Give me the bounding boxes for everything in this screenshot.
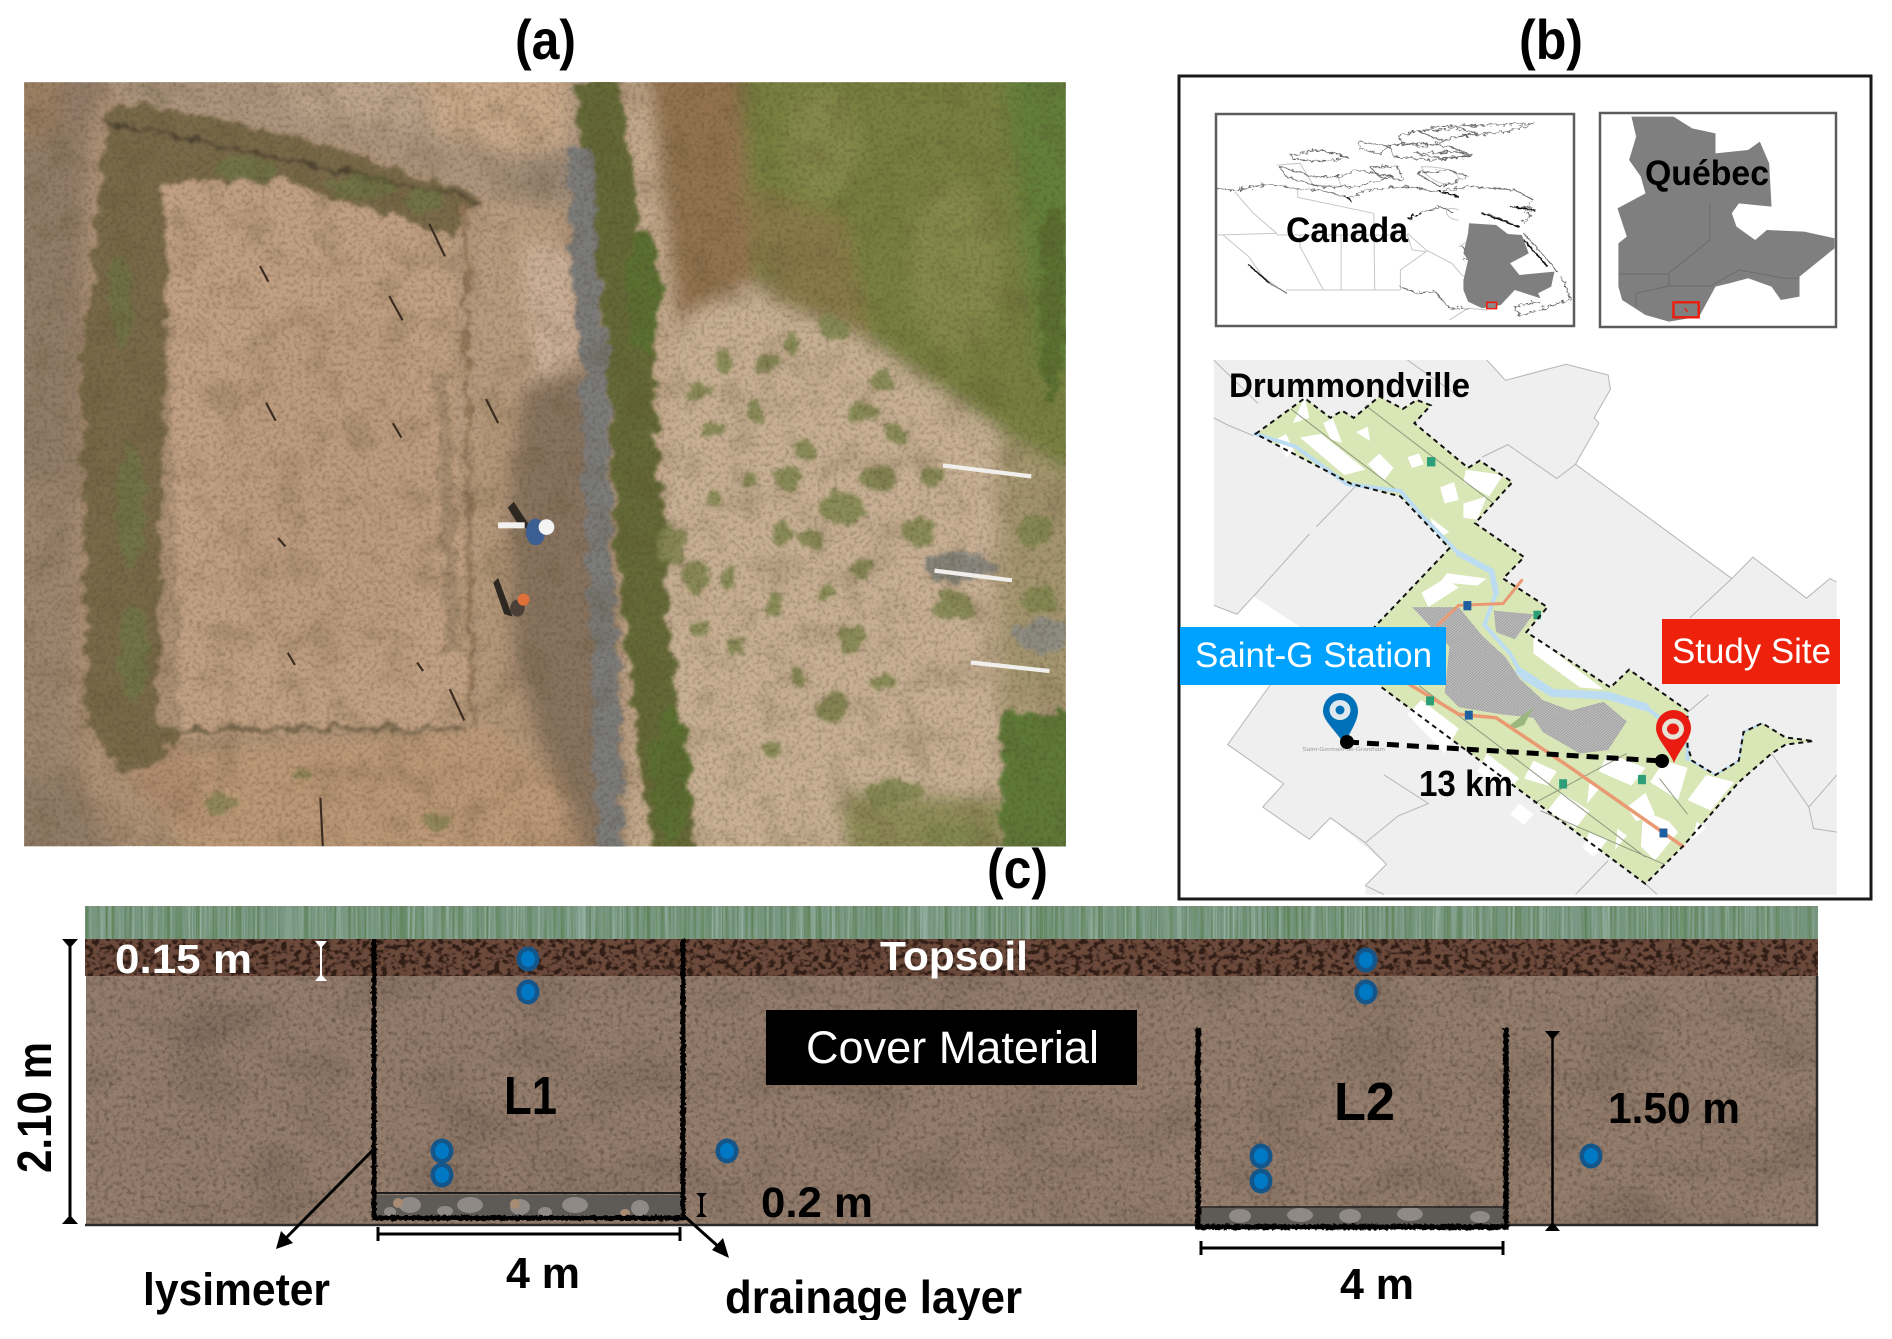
lysimeter walls L2 — [1198, 1028, 1506, 1227]
dimension: 2.10 m — [9, 939, 78, 1224]
inset map: Québec — [1600, 113, 1836, 327]
sensor outside L1 — [716, 1138, 738, 1164]
drainage layer L1 — [376, 1193, 681, 1218]
dimension: 0.2 m — [696, 1179, 873, 1227]
sensors L1 — [430, 946, 540, 1188]
label: Québec: Québec — [1645, 154, 1769, 193]
dimension: 0.2 m: 0.2 m — [761, 1179, 873, 1227]
dimension: 4 m under L1: 4 m — [506, 1249, 580, 1298]
callout: Saint-G Station — [1180, 627, 1446, 685]
map: Drummondville municipality: Saint-Germain-de-Grantham — [1302, 748, 1385, 753]
panel label (c): (c) — [987, 837, 1048, 900]
label: Topsoil: Topsoil — [880, 933, 1028, 979]
lysimeter L2 — [1198, 948, 1506, 1227]
panel a: aerial photo of the test field — [0, 60, 1088, 870]
dimension: 4 m under L2: 4 m — [1340, 1260, 1414, 1309]
dimension: 4 m under L1 — [378, 1227, 680, 1298]
callout: Saint-G Station: Saint-G Station — [1195, 636, 1432, 675]
panel label (b): (b) — [1519, 8, 1583, 71]
dimension: 1.50 m: 1.50 m — [1608, 1084, 1740, 1133]
cover material layer — [85, 976, 1817, 1225]
label: lysimeter: lysimeter — [143, 1264, 330, 1315]
panel b: location maps frame — [1179, 76, 1871, 899]
icon: person in orange hat — [493, 578, 530, 617]
map: Drummondville municipality — [1214, 360, 1837, 895]
lysimeter walls L1 — [374, 939, 683, 1218]
dimension: topsoil thickness — [315, 941, 327, 981]
label: Drummondville: Drummondville — [1229, 367, 1470, 405]
white pipes — [935, 465, 1049, 671]
panel label (a): (a) — [515, 8, 576, 71]
label box: Cover Material — [766, 1010, 1137, 1085]
grass layer — [85, 906, 1818, 939]
icon: red study site pin — [1656, 710, 1691, 763]
distance line between station and study site — [1340, 735, 1669, 768]
label: L2: L2 — [1334, 1072, 1395, 1132]
dimension: 1.50 m — [1545, 1031, 1740, 1231]
inset map: Canada — [1216, 114, 1574, 326]
label: 0.15 m: 0.15 m — [115, 936, 252, 982]
icon: person in white hat — [498, 502, 554, 545]
callout: Study Site — [1662, 619, 1840, 684]
callout: Study Site: Study Site — [1672, 632, 1831, 671]
label: L1: L1 — [504, 1066, 557, 1126]
label: Canada: Canada — [1286, 211, 1409, 250]
label: drainage layer: drainage layer — [725, 1271, 1022, 1323]
sensors L2 — [1250, 948, 1378, 1194]
dimension: 4 m under L2 — [1201, 1241, 1503, 1309]
label: 13 km: 13 km — [1419, 763, 1513, 804]
topsoil layer — [85, 939, 1818, 976]
icon: blue station pin — [1323, 693, 1358, 745]
sensor outside L2 — [1580, 1144, 1602, 1168]
lysimeter L1 — [374, 939, 683, 1218]
arrow: lysimeter — [276, 1150, 373, 1249]
arrow: drainage layer — [683, 1215, 729, 1258]
dimension: 2.10 m: 2.10 m — [9, 1042, 62, 1173]
stakes and instruments — [260, 224, 498, 846]
panel c: soil cross-section — [9, 906, 1818, 1323]
drainage layer L2 — [1200, 1207, 1504, 1227]
label box: Cover Material: Cover Material — [806, 1022, 1099, 1073]
